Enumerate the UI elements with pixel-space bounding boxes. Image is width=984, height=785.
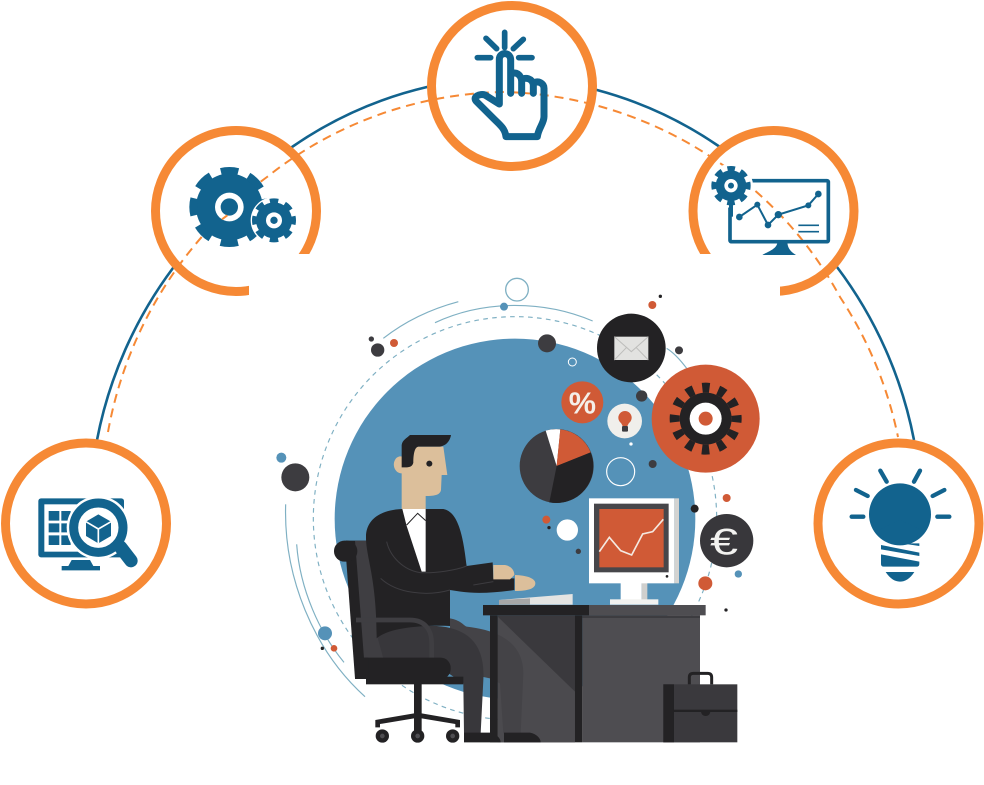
bulb badge [607, 404, 642, 438]
desk [483, 605, 706, 742]
chair seat and arm [355, 620, 463, 684]
hands [493, 565, 514, 579]
percent badge: % [569, 386, 596, 420]
white panel behind the illustration [249, 254, 780, 785]
node ring: top [432, 6, 592, 166]
icon: gears [193, 171, 297, 244]
orbit lines [286, 302, 717, 720]
desk leg [490, 615, 498, 742]
office chair [334, 541, 460, 743]
connecting arc: solid blue [97, 80, 914, 440]
node ring: chart [693, 130, 854, 292]
far leg [450, 618, 523, 733]
connecting arc: dashed orange [108, 92, 898, 437]
keyboard [499, 594, 573, 605]
hair [402, 435, 451, 467]
eye [426, 461, 432, 467]
businessman [366, 435, 541, 742]
gear badge [652, 365, 760, 473]
pie chart [520, 429, 594, 503]
percent badge [561, 381, 603, 423]
icon: monitor chart with gear [709, 164, 828, 255]
desktop monitor [589, 498, 679, 605]
suit [366, 509, 514, 638]
briefcase [663, 673, 737, 742]
euro badge: € [710, 522, 738, 563]
near leg [377, 626, 483, 733]
suit seams [381, 542, 493, 593]
icon: pointing hand [475, 32, 544, 137]
neck and head [394, 447, 447, 509]
euro badge [700, 514, 753, 567]
node ring: gears [156, 130, 316, 292]
illustration: businessman at desk [276, 278, 760, 743]
node ring: bulb [818, 443, 979, 604]
collar [407, 513, 426, 525]
shirt [402, 509, 426, 572]
blue backdrop circle [335, 339, 695, 699]
icon: light bulb [852, 471, 949, 582]
node ring: left [6, 443, 166, 604]
mail badge [597, 314, 666, 382]
floating dots [276, 295, 742, 652]
hollow circle top [506, 278, 528, 301]
shoes [464, 733, 541, 742]
icon: search monitor with cube [38, 496, 131, 570]
